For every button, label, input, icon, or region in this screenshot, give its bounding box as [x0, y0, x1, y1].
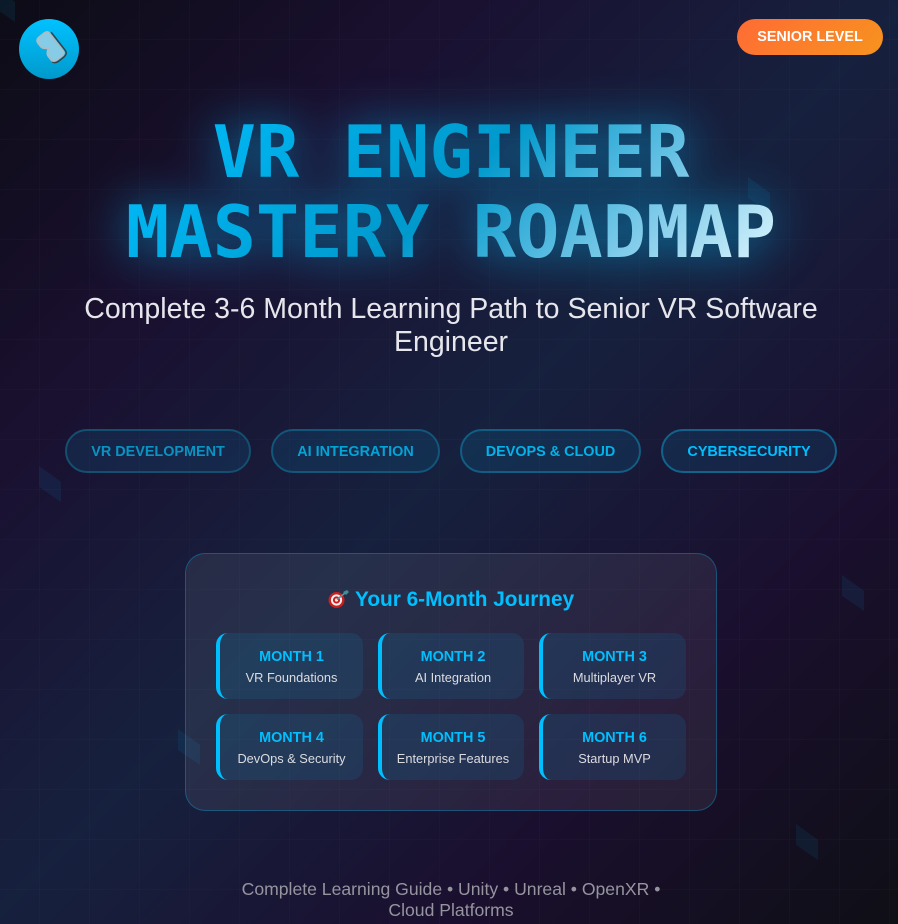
pill: AI integration: AI INTEGRATION [297, 444, 414, 460]
month 1 card [216, 633, 363, 699]
pill: AI integration [271, 429, 440, 473]
title [100, 95, 794, 285]
month 2 card [378, 633, 524, 699]
title: VR ENGINEER [213, 110, 689, 194]
month 3 card: MONTH 3 [582, 649, 647, 665]
footer text [242, 879, 660, 920]
month 1 card: VR Foundations [246, 670, 337, 685]
logo: VR headset icon [19, 19, 79, 79]
topic pills [65, 429, 837, 473]
pill: DevOps & cloud: DEVOPS & CLOUD [486, 444, 615, 460]
subtitle: Complete 3-6 Month Learning Path to Senior VR Software [84, 293, 818, 325]
panel: 6-month journey [185, 553, 717, 811]
badge: senior level: SENIOR LEVEL [757, 29, 863, 45]
month 5 card: MONTH 5 [421, 730, 485, 746]
panel heading: Your 6-Month Journey [355, 588, 574, 611]
month 6 card [539, 714, 686, 780]
pill: cybersecurity: CYBERSECURITY [687, 444, 811, 460]
month 5 card: Enterprise Features [397, 751, 509, 766]
icon: target with dart [328, 590, 349, 608]
pill: VR development [65, 429, 251, 473]
pill: cybersecurity [661, 429, 837, 473]
month 4 card: MONTH 4 [259, 730, 324, 746]
footer text: Cloud Platforms [388, 900, 514, 920]
month 1 card: MONTH 1 [259, 649, 324, 665]
footer text: Complete Learning Guide • Unity • Unreal • OpenXR • [242, 879, 660, 899]
month 6 card: Startup MVP [578, 751, 651, 766]
month 4 card [216, 714, 363, 780]
month 6 card: MONTH 6 [582, 730, 647, 746]
month 2 card: MONTH 2 [421, 649, 485, 665]
subtitle: Engineer [394, 326, 508, 358]
title: MASTERY ROADMAP [126, 190, 776, 274]
month 3 card: Multiplayer VR [573, 670, 656, 685]
pill: DevOps & cloud [460, 429, 641, 473]
badge: senior level [737, 19, 883, 55]
month 5 card [378, 714, 524, 780]
subtitle [84, 293, 818, 358]
pill: VR development: VR DEVELOPMENT [91, 444, 225, 460]
month 2 card: AI Integration [415, 670, 491, 685]
month 3 card [539, 633, 686, 699]
month 4 card: DevOps & Security [237, 751, 346, 766]
